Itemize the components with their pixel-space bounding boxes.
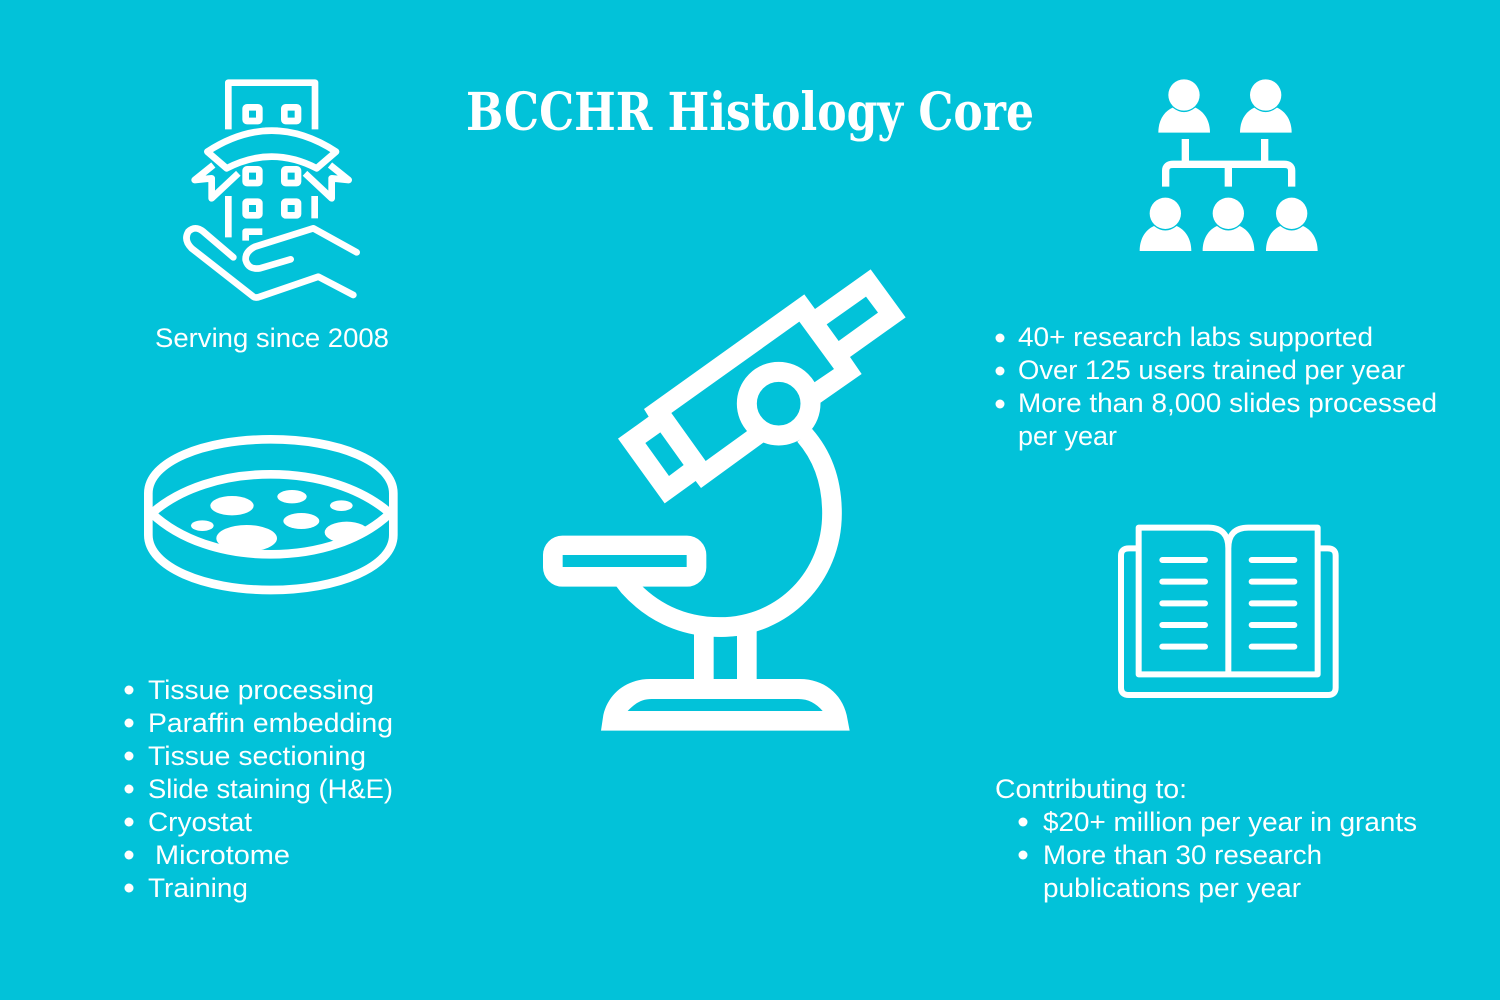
contribution: publications: More than 30 research — [1043, 840, 1322, 870]
connector lines — [1166, 139, 1292, 187]
bullet dots — [996, 334, 1004, 408]
bullet dots — [1018, 818, 1028, 860]
service: slide staining: Slide staining (H&E) — [148, 774, 393, 804]
stat: slides processed: per year — [1018, 421, 1117, 451]
contributing heading: Contributing to: — [995, 774, 1187, 804]
microscope tube — [618, 269, 906, 503]
contribution: publications: publications per year — [1043, 873, 1301, 903]
icon: people organization chart — [1140, 79, 1318, 251]
icon: building held in hand with ribbon — [186, 83, 357, 297]
service: tissue sectioning: Tissue sectioning — [148, 741, 366, 771]
microscope stage — [543, 536, 706, 587]
service: tissue processing: Tissue processing — [148, 675, 374, 705]
microscope arm — [620, 435, 832, 627]
bottom row people — [1140, 198, 1318, 251]
microscope base — [601, 679, 850, 731]
icon: petri dish — [148, 439, 393, 590]
stat: slides processed — [1018, 388, 1437, 451]
icon: microscope — [543, 269, 906, 731]
stat: slides processed: More than 8,000 slides processed — [1018, 388, 1437, 418]
contribution: grants: $20+ million per year in grants — [1043, 807, 1417, 837]
title: BCCHR Histology Core — [466, 82, 1034, 143]
stat: users trained: Over 125 users trained per year — [1018, 355, 1405, 385]
microscope stem — [694, 630, 757, 680]
text: contributing to — [995, 774, 1417, 903]
caption: serving since: Serving since 2008 — [155, 323, 389, 353]
icon: open book — [1121, 528, 1336, 695]
service: microtome: Microtome — [155, 840, 290, 870]
service: paraffin embedding: Paraffin embedding — [148, 708, 393, 738]
bullet dots — [124, 686, 134, 892]
top row people — [1158, 79, 1292, 133]
stat: research labs: 40+ research labs supported — [1018, 322, 1373, 352]
contribution: publications — [1043, 840, 1322, 903]
microscope focus wheel — [747, 372, 810, 435]
service: training: Training — [148, 873, 248, 903]
infographic canvas — [124, 79, 1436, 902]
list: impact numbers — [996, 322, 1437, 451]
list: services — [124, 675, 393, 903]
service: cryostat: Cryostat — [148, 807, 253, 837]
